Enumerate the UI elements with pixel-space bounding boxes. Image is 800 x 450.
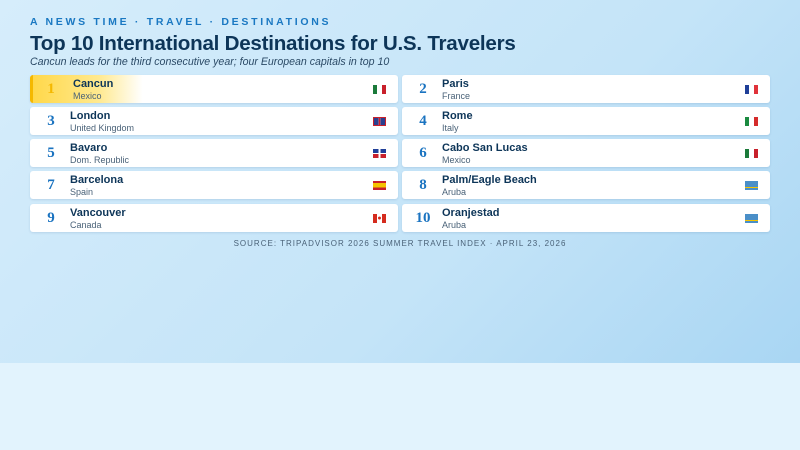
row 5 Bavaro: Dom. Republic — [70, 155, 129, 165]
row 6 Cabo: Mexico — [442, 155, 471, 165]
row 5 Bavaro — [30, 139, 398, 167]
row 2 Paris: Paris — [442, 78, 469, 90]
row 6 Cabo: 6 — [419, 145, 427, 161]
row 3 London — [30, 107, 398, 135]
row 9 Vancouver: 9 — [47, 210, 55, 226]
row 1 Cancun: Mexico — [73, 91, 102, 101]
row 5 Bavaro: 5 — [47, 145, 55, 161]
row 9 Vancouver: Canada — [70, 220, 102, 230]
row 2 Paris — [402, 75, 770, 103]
row 7 Barcelona: Spain — [70, 187, 93, 197]
row 4 Rome — [402, 107, 770, 135]
row 2 Paris: 2 — [419, 81, 427, 97]
row 5 Bavaro: Bavaro — [70, 142, 107, 154]
row 1 Cancun: 1 — [47, 81, 55, 97]
row 3 London: London — [70, 110, 110, 122]
row 4 Rome: 4 — [419, 113, 427, 129]
kicker: A NEWS TIME · TRAVEL · DESTINATIONS — [30, 16, 331, 28]
row 4 Rome: Italy — [442, 123, 459, 133]
row 9 Vancouver: ● — [377, 215, 382, 222]
row 10 Oranjestad: Aruba — [442, 220, 466, 230]
row 10 Oranjestad: 10 — [416, 210, 430, 226]
row 7 Barcelona: 7 — [47, 177, 55, 193]
row 8 Palm/Eagle — [402, 171, 770, 199]
row 10 Oranjestad: Oranjestad — [442, 207, 499, 219]
row 1 Cancun — [30, 75, 398, 103]
row 6 Cabo: Cabo San Lucas — [442, 142, 528, 154]
row 7 Barcelona — [30, 171, 398, 199]
row 8 Palm/Eagle: Aruba — [442, 187, 466, 197]
row 10 Oranjestad — [402, 204, 770, 232]
row 2 Paris: France — [442, 91, 470, 101]
row 4 Rome: Rome — [442, 110, 473, 122]
row 9 Vancouver — [30, 204, 398, 232]
row 8 Palm/Eagle: 8 — [419, 177, 427, 193]
row 9 Vancouver: Vancouver — [70, 207, 126, 219]
row 3 London: United Kingdom — [70, 123, 134, 133]
row 7 Barcelona: Barcelona — [70, 174, 123, 186]
row 3 London: 3 — [47, 113, 55, 129]
row 1 Cancun: Cancun — [73, 78, 113, 90]
subtitle: Cancun leads for the third consecutive year; four European capitals in top 10 — [30, 56, 389, 68]
row 8 Palm/Eagle: Palm/Eagle Beach — [442, 174, 537, 186]
row 6 Cabo — [402, 139, 770, 167]
source: SOURCE: TRIPADVISOR 2026 SUMMER TRAVEL INDEX · APRIL 23, 2026 — [234, 239, 566, 248]
title: Top 10 International Destinations for U.S. Travelers — [30, 32, 516, 55]
